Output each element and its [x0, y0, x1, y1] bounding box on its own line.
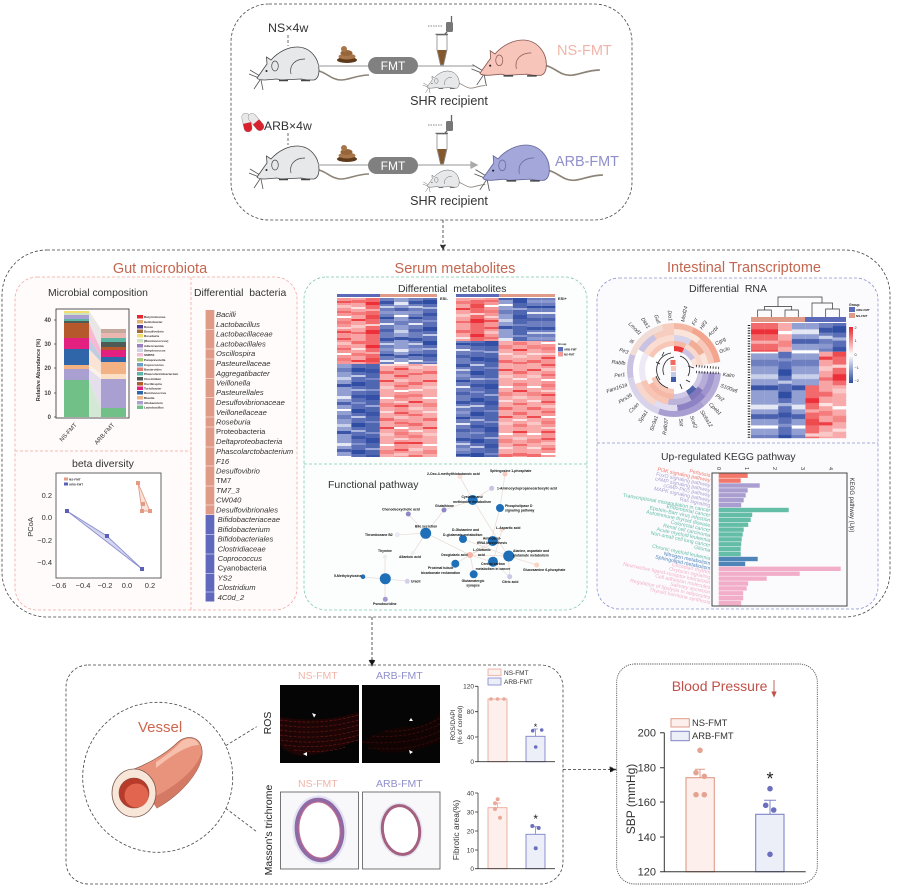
- stacked bar chart: 20: [44, 366, 52, 372]
- scatter plot: PCoA: −0.4: [37, 558, 52, 567]
- network: functional pathway: Aminoacyl-: [483, 536, 501, 540]
- icon: ARB capsules: [241, 112, 265, 133]
- gene labels: S100a6: [719, 383, 738, 395]
- heading: serum metabolites: Serum metabolites: [395, 261, 515, 277]
- bacteria list: TM7: [216, 476, 231, 485]
- gene labels: Sat: [677, 418, 684, 427]
- legend: genera: Lactobacillus: [144, 406, 164, 410]
- icon: ARB-FMT rat: [474, 145, 603, 191]
- network: functional pathway: D-Glutamine and: [452, 528, 479, 532]
- KEGG pathway labels: Cell adhesion molecules: [655, 573, 711, 591]
- network: functional pathway: metabolism in cancer: [476, 567, 511, 571]
- KEGG pathway labels: cGMP-PKG pathway: [663, 483, 711, 499]
- label: Masson's trichrome: Masson's trichrome: [263, 784, 275, 875]
- bar chart: SBP: NS-FMT: [692, 717, 728, 728]
- network: functional pathway: Thromboxane B2: [365, 533, 393, 537]
- badge: NS FMT: FMT: [381, 59, 406, 73]
- gene labels: Med24: [680, 306, 689, 322]
- stacked bar chart: 30: [44, 342, 52, 348]
- icon: ARB donor rat: [249, 146, 369, 189]
- label: NS×4w: NS×4w: [268, 21, 308, 35]
- network: functional pathway: acid: [478, 553, 485, 557]
- heatmap: left: [337, 294, 437, 457]
- bar chart: ROS/DAPI: 120: [463, 684, 474, 690]
- KEGG pathway labels: Colorectal cancer: [670, 520, 711, 534]
- bacteria list: Aggregatibacter: [215, 369, 270, 378]
- panel: vessel: [66, 665, 563, 884]
- legend: heatmap group: Group: [558, 342, 567, 346]
- heading: gut microbiota: Gut microbiota: [113, 261, 208, 277]
- network: functional pathway: D-glutamate metabolism: [443, 533, 482, 537]
- icon: ARB tube: [428, 115, 453, 164]
- network: functional pathway: [334, 469, 566, 606]
- network: functional pathway: Glutamatergic: [462, 579, 485, 583]
- badge: NS FMT: [368, 57, 418, 74]
- gene labels: Csan: [628, 402, 641, 415]
- heading: blood pressure: Blood Pressure: [672, 678, 768, 694]
- bacteria list: F16: [216, 457, 230, 466]
- micrograph: Masson ARB: [362, 792, 440, 869]
- arrow: decrease: [772, 680, 776, 696]
- gene labels: Fzr: [691, 317, 700, 326]
- bar chart: KEGG: 2: [771, 467, 777, 470]
- KEGG pathway labels: Acute myeloid leukemia: [656, 527, 711, 544]
- gene labels: Dkk1: [639, 317, 651, 330]
- scatter plot: PCoA: −0.2: [37, 536, 52, 545]
- bacteria list: Veillonellaceae: [216, 408, 267, 417]
- bacteria list: Desulfovibrionales: [216, 506, 278, 514]
- gene labels: Hif3: [699, 320, 709, 331]
- gene labels: Acrbl: [706, 325, 720, 339]
- KEGG pathway labels: Salivary secretion: [670, 582, 711, 596]
- scatter plot: PCoA: [26, 473, 161, 590]
- connector lines: [226, 727, 257, 832]
- legend: RNA colour bar: −2: [854, 379, 859, 383]
- network: functional pathway: signaling pathway: [505, 508, 535, 512]
- legend: RNA colour bar: [849, 303, 870, 383]
- gene labels: Scel2: [688, 415, 698, 429]
- bar chart: fibrotic area: 10: [467, 848, 474, 854]
- legend: genera: Adlercreutzia: [144, 344, 164, 348]
- gene labels: Ralb37: [662, 417, 670, 435]
- bacteria list: Desulfovibrionaceae: [216, 398, 285, 407]
- bar chart: SBP: [624, 717, 806, 878]
- network: functional pathway: Alanine, aspartate and: [513, 549, 549, 553]
- legend: RNA colour bar: −1: [854, 366, 859, 370]
- scatter plot: PCoA: −0.4: [76, 581, 90, 590]
- KEGG pathway labels: cAMP signaling pathway: [654, 476, 711, 494]
- bacteria list: Oscillospira: [216, 349, 255, 358]
- bacteria list: Phascolarctobacterium: [216, 447, 293, 456]
- bar chart: fibrotic area: Fibrotic area(%): [451, 800, 461, 860]
- KEGG pathway labels: [622, 467, 711, 606]
- arrow: design to omics: [440, 220, 446, 250]
- legend: genera: Roseburia: [144, 334, 159, 338]
- bacteria list: Deltaproteobacteria: [216, 437, 282, 446]
- icon: NS donor rat: [249, 47, 369, 90]
- bar chart: SBP: *: [766, 769, 774, 789]
- network: functional pathway: Pseudouridine: [373, 602, 397, 606]
- bacteria list: CW040: [216, 496, 242, 504]
- gene labels: Spta1: [637, 409, 650, 424]
- KEGG pathway labels: Thyroid hormone synthesis: [649, 587, 711, 606]
- stacked bar chart: 10: [44, 391, 52, 397]
- gene labels: Gull: [652, 314, 661, 325]
- legend: RNA colour bar: 2: [854, 326, 857, 330]
- heatmap: RNA: [749, 297, 846, 438]
- legend: genera: Desulfovibrio: [144, 330, 164, 334]
- label: ARB-FMT ROS: ARB-FMT: [376, 670, 423, 682]
- KEGG pathway labels: MAPK signaling pathway: [653, 486, 711, 504]
- label: NS-FMT ROS: NS-FMT: [298, 670, 338, 682]
- bar chart: ROS/DAPI: NS-FMT: [504, 670, 529, 677]
- bar chart: ROS/DAPI: 80: [467, 709, 474, 716]
- KEGG pathway labels: Renal cell carcinoma: [662, 523, 711, 539]
- bar chart: ROS/DAPI: *: [534, 722, 538, 732]
- icon: blood vessel: [112, 737, 202, 817]
- micrograph: ROS NS: [280, 685, 359, 763]
- network: functional pathway: L-Glutamic: [473, 548, 491, 552]
- bacteria list: Bifidobacteriales: [218, 534, 274, 544]
- gene labels: Rabfb: [611, 359, 626, 367]
- bacteria list: YS2: [218, 574, 233, 582]
- arrow: NS dosing: [287, 35, 289, 46]
- bacteria list: Lactobacillales: [216, 340, 266, 348]
- scatter plot: PCoA: PCoA: [26, 517, 35, 537]
- KEGG pathway labels: Endometrial cancer: [666, 504, 711, 519]
- legend: genera: Coprococcus: [144, 363, 164, 367]
- KEGG pathway labels: PI3K signaling pathway: [657, 467, 711, 484]
- label: NS-FMT: NS-FMT: [557, 43, 612, 59]
- bacteria list: Proteobacteria: [216, 427, 266, 436]
- bar chart: ROS/DAPI: [450, 669, 555, 766]
- panel: FMT experimental design: [231, 4, 632, 220]
- legend: genera: Streptococcus: [144, 348, 166, 352]
- network: functional pathway: 1-Aminocyclopropanecarboxylic acid: [497, 486, 557, 490]
- scatter plot: PCoA: NS-FMT: [69, 478, 81, 482]
- legend: genera: Helicobacter: [144, 320, 163, 324]
- gene labels: Cgrg: [714, 336, 727, 347]
- scatter plot: PCoA: 0.2: [42, 491, 52, 500]
- bar chart: ROS/DAPI: (% of control): [457, 706, 464, 744]
- bar chart: SBP: 160: [638, 797, 656, 809]
- label: ESI+ right: ESI+: [558, 296, 567, 301]
- scatter plot: PCoA: 0.2: [145, 581, 155, 590]
- vessel magnifier circle: [83, 702, 233, 852]
- network: functional pathway: glutamate metabolism: [513, 554, 549, 558]
- legend: genera: Allobaculum: [144, 401, 163, 405]
- network: functional pathway: 2-Oxo-4-methylthiobutanoic acid: [427, 472, 480, 476]
- badge: ARB FMT: FMT: [381, 159, 406, 173]
- heatmap: right: [456, 294, 555, 457]
- network: functional pathway: Cysteine and: [461, 495, 483, 499]
- KEGG pathway labels: Regulation of lipolysis in adipocytes: [629, 578, 711, 601]
- micrograph: Masson NS: [280, 792, 358, 869]
- legend: RNA colour bar: 1: [854, 339, 857, 343]
- heading: differential RNA: Differential RNA: [689, 283, 767, 295]
- bacteria list: Clostridiaceae: [218, 544, 266, 554]
- gene labels: Pir3: [618, 347, 629, 356]
- arrow: omics to vessel: [369, 617, 375, 666]
- heading: microbial composition: Microbial composition: [48, 288, 148, 299]
- heading: beta diversity: beta diversity: [72, 458, 135, 470]
- gene labels: Ifi: [628, 338, 635, 346]
- bacteria list: Desulfovibrio: [216, 466, 260, 476]
- KEGG pathway labels: Ras signaling: [679, 497, 711, 509]
- scatter plot: PCoA: 0.0: [122, 581, 132, 590]
- network: functional pathway: Glucosamine 6-phosphate: [523, 568, 566, 572]
- KEGG pathway labels: Epstein-Barr virus infection: [649, 505, 711, 524]
- network: functional pathway: L-Aspartic acid: [496, 526, 520, 530]
- gene labels: Slc6a12: [698, 409, 713, 429]
- legend: genera: Clostridium: [144, 377, 161, 381]
- legend: genera: Phascolarctobacterium: [144, 372, 178, 376]
- network: functional pathway: Proximal tubule: [428, 566, 454, 570]
- bar chart: ROS/DAPI: ROS/DAPI: [450, 709, 457, 741]
- bar chart: KEGG: 0: [715, 467, 721, 470]
- bar chart: ROS/DAPI: 0: [470, 759, 474, 766]
- legend: RNA colour bar: NS-FMT: [856, 314, 867, 318]
- network: functional pathway: Chenodeoxycholic acid: [382, 508, 420, 512]
- network: functional pathway: Glutathione: [435, 504, 454, 508]
- KEGG pathway labels: Nitrogen metabolism: [663, 551, 711, 567]
- icon: NS feces: [337, 46, 357, 63]
- arrow: NS transfer line: [318, 65, 474, 67]
- arrow: vessel to blood pressure: [563, 767, 616, 772]
- network: functional pathway: tRNA biosynthesis: [477, 541, 507, 545]
- bacteria list: 4C0d_2: [218, 593, 245, 602]
- bacteria list: Cyanobacteria: [218, 564, 267, 572]
- scatter plot: PCoA: ARB-FMT: [69, 482, 83, 486]
- KEGG pathway labels: Pertussis: [689, 469, 711, 479]
- KEGG pathway labels: Chronic myeloid leukemia: [651, 544, 711, 562]
- bar chart: SBP: 140: [638, 832, 656, 844]
- stacked bar chart: 0: [48, 415, 52, 421]
- legend: genera: [137, 315, 178, 410]
- bacteria list: [206, 310, 293, 602]
- label: ARB×4w: ARB×4w: [264, 119, 312, 133]
- legend: genera: Blautia: [144, 396, 155, 400]
- gene labels: Gclu: [719, 346, 731, 355]
- network: functional pathway: Thymine: [378, 549, 392, 553]
- legend: RNA colour bar: Group: [849, 303, 860, 307]
- badge: ARB FMT: [368, 157, 418, 174]
- legend: genera: Dorea: [144, 325, 153, 329]
- bar chart: fibrotic area: 40: [467, 790, 474, 798]
- KEGG pathway labels: Neuroactive ligand-receptor interaction: [622, 562, 711, 586]
- KEGG pathway labels: Glioma: [694, 545, 711, 554]
- network: functional pathway: Bile secretion: [415, 524, 437, 528]
- bar chart: ROS/DAPI: ARB-FMT: [504, 679, 533, 686]
- legend: genera: Bacteroides: [144, 368, 162, 372]
- label: NS-FMT Masson: NS-FMT: [298, 778, 338, 790]
- KEGG pathway labels: Non-small cell lung cancer: [650, 530, 711, 549]
- label: ARB-FMT Masson: ARB-FMT: [376, 778, 423, 790]
- category labels: NS-FMT: [59, 422, 79, 443]
- network: functional pathway: synapse: [466, 584, 480, 588]
- label: NS SHR recipient: SHR recipient: [410, 94, 488, 108]
- bar chart: fibrotic area: [451, 790, 555, 873]
- gene labels: Lmod1: [627, 321, 642, 337]
- bacteria list: Clostridium: [218, 583, 256, 592]
- panel: omics container: [2, 250, 890, 617]
- category labels: ARB-FMT: [94, 422, 117, 446]
- bar chart: SBP: 200: [638, 728, 656, 740]
- bacteria list: Veillonella: [216, 378, 250, 388]
- bacteria list: Pasteurellales: [216, 388, 264, 397]
- stacked bar chart: 40: [44, 318, 52, 324]
- label: ROS: ROS: [262, 712, 274, 734]
- bar chart: ROS/DAPI: 40: [467, 734, 474, 742]
- legend: heatmap group: ARB-FMT: [564, 348, 577, 352]
- icon: ARB small recipient rat: [423, 170, 485, 192]
- bar chart: fibrotic area: 0: [470, 866, 474, 873]
- gene labels: Fam161a: [606, 382, 628, 395]
- bar chart: KEGG: 4: [827, 467, 833, 470]
- legend: genera: Paraprevotella: [144, 358, 166, 362]
- arrow: ARB dosing: [287, 133, 289, 145]
- label: ARB-FMT: ARB-FMT: [555, 154, 619, 170]
- bar chart: KEGG: 1: [743, 467, 749, 470]
- heading: KEGG: Up-regulated KEGG pathway: [661, 452, 796, 463]
- KEGG pathway labels: FoxO signaling pathway: [655, 472, 711, 489]
- bar chart: SBP: 120: [638, 866, 656, 878]
- bar chart: fibrotic area: *: [533, 812, 538, 826]
- network: functional pathway: Citric acid: [502, 580, 518, 584]
- KEGG pathway labels: Oxytocin signaling: [668, 566, 711, 581]
- KEGG pathway labels: Circadian rhythm: [671, 562, 711, 576]
- category labels: [59, 422, 117, 446]
- arrow: ARB transfer line: [318, 162, 477, 168]
- legend: genera: Oscillospira: [144, 382, 162, 386]
- bar chart: fibrotic area: 20: [467, 828, 474, 836]
- gene labels: Cpeb1: [707, 402, 722, 417]
- KEGG pathway labels: Sphingolipid metabolism: [655, 554, 711, 572]
- legend: genera: Butyricimonas: [144, 315, 166, 319]
- heading: functional pathway: Functional pathway: [328, 479, 419, 491]
- bar chart: KEGG: [712, 467, 854, 606]
- network: functional pathway: Phospholipase D: [505, 504, 533, 508]
- panel: serum metabolites: [304, 261, 587, 610]
- icon: NS tube: [428, 16, 453, 65]
- bacteria list: Bifidobacterium: [218, 525, 270, 534]
- icon: ARB feces: [337, 145, 357, 162]
- network: functional pathway: 5-Methylcytosine: [334, 574, 362, 578]
- panel: blood pressure: [617, 664, 817, 884]
- bacteria list: Bifidobacteriaceae: [218, 515, 280, 524]
- micrograph: ROS ARB: [362, 685, 440, 763]
- network: functional pathway: Oxoglutaric acid: [441, 553, 468, 557]
- legend: genera: Turicibacter: [144, 386, 162, 390]
- gene labels: Per1: [614, 372, 626, 379]
- bacteria list: Lactobacillus: [216, 320, 260, 329]
- network: functional pathway: bicarbonate reclamation: [421, 571, 460, 575]
- bar chart: KEGG: 3: [799, 467, 805, 470]
- legend: genera: [Ruminococcus]: [144, 339, 168, 343]
- label: ESI- left: ESI-: [440, 296, 448, 301]
- panel: gut microbiota: [15, 261, 297, 610]
- label: ARB SHR recipient: SHR recipient: [410, 194, 488, 208]
- axis label: SBP: SBP (mmHg): [624, 764, 638, 834]
- heading: intestinal transcriptome: Intestinal Transcriptome: [667, 260, 821, 276]
- axis label: Relative Abundance (%): [36, 339, 42, 401]
- legend: heatmap group: [558, 342, 577, 356]
- gene labels: Dio1: [666, 310, 673, 322]
- icon: NS-FMT rat: [471, 40, 600, 86]
- heading: differential bacteria: Differential bacteria: [194, 288, 286, 299]
- panel: intestinal transcriptome: [597, 260, 878, 609]
- bar chart: fibrotic area: 30: [467, 810, 474, 816]
- legend: genera: SMB53: [144, 353, 155, 357]
- network: functional pathway: Uracil: [411, 580, 420, 584]
- legend: genera: Ruminococcus: [144, 391, 166, 395]
- bar chart: SBP: ARB-FMT: [692, 730, 734, 741]
- KEGG pathway labels: Autoimmune thyroid disease: [646, 509, 711, 529]
- stacked bar chart: [36, 309, 129, 446]
- axis label: KEGG: KEGG pathway (Up): [848, 478, 854, 532]
- bacteria list: TM7_3: [216, 486, 240, 495]
- heading: differential metabolites: Differential metabolites: [398, 284, 506, 295]
- gene labels: Ptrs35: [618, 393, 634, 406]
- scatter plot: PCoA: 0.0: [42, 513, 52, 522]
- scatter plot: PCoA: −0.6: [52, 581, 66, 590]
- bacteria list: Coprococcus: [218, 554, 262, 563]
- network: functional pathway: methionine metabolism: [453, 500, 491, 504]
- gene labels: Pir2: [714, 393, 725, 403]
- gene labels: Slc9a1: [649, 415, 660, 432]
- network: functional pathway: Allantoic acid: [399, 555, 421, 559]
- legend: heatmap group: NS-FMT: [564, 352, 575, 356]
- scatter plot: PCoA: −0.2: [98, 581, 112, 590]
- gene labels: [606, 306, 738, 435]
- legend: RNA colour bar: ARB-FMT: [856, 308, 870, 312]
- heading: vessel: Vessel: [138, 719, 182, 736]
- bar chart: SBP: 180: [638, 762, 656, 774]
- bacteria list: Pasteurellaceae: [216, 359, 270, 368]
- network: functional pathway: Sphingosine 1-phosphate: [490, 469, 532, 473]
- bacteria list: Lactobacillaceae: [216, 330, 273, 338]
- legend: RNA colour bar: 0: [854, 353, 857, 357]
- bacteria list: Roseburia: [216, 418, 251, 426]
- chart: circular heatmap: [627, 323, 721, 417]
- KEGG pathway labels: Transcriptional misregulation in cancer: [622, 493, 711, 514]
- gene labels: Kalm: [722, 372, 736, 379]
- network: functional pathway: Central carbon: [481, 562, 505, 566]
- icon: NS small recipient rat: [423, 71, 485, 93]
- bacteria list: Bacilli: [216, 310, 236, 319]
